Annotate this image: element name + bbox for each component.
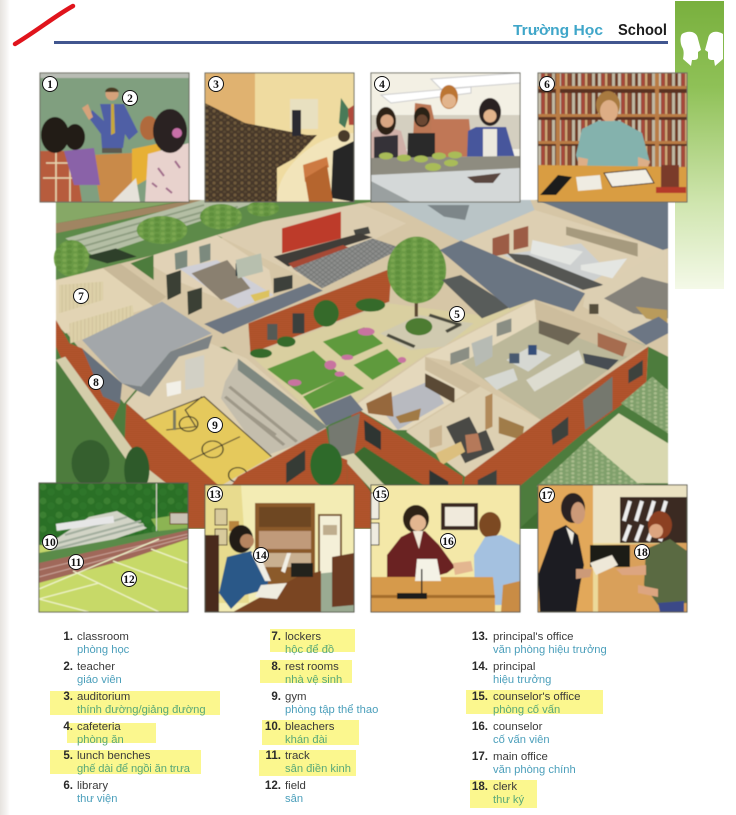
- item 16: 16.: [472, 720, 488, 733]
- flag: [339, 98, 350, 128]
- badge 11: 11: [71, 557, 82, 569]
- item 15: 15.: [472, 690, 488, 703]
- white margin below plan: [186, 529, 540, 619]
- item 18: clerk: [493, 781, 517, 793]
- connecting roof: [314, 395, 363, 426]
- item 2: teacher: [77, 661, 115, 673]
- bleachers stands: [221, 360, 326, 457]
- item 4: cafeteria: [77, 721, 121, 733]
- item 12: [265, 779, 306, 805]
- panel: athletics field: [39, 483, 188, 612]
- badge 14: [254, 548, 268, 562]
- badge 12: 12: [123, 574, 135, 586]
- benches area: [442, 275, 511, 318]
- item 6: thư viện: [77, 793, 117, 805]
- library corner: [583, 250, 668, 345]
- item 8: nhà vệ sinh: [285, 674, 342, 686]
- item 16: counselor: [493, 721, 543, 733]
- auditorium seats: [293, 238, 402, 288]
- badge 7: [74, 288, 88, 304]
- item 14: [472, 660, 551, 686]
- badge 13: [208, 486, 222, 502]
- item 3: thính đường/giảng đường: [77, 704, 206, 716]
- badge 14: 14: [255, 550, 267, 562]
- item 1: classroom: [77, 631, 129, 643]
- item 9: gym: [285, 691, 307, 703]
- item 11: 11.: [266, 749, 281, 762]
- item 10: bleachers: [285, 721, 335, 733]
- brick wall auditorium: [248, 268, 391, 353]
- sports field behind school: [54, 200, 377, 280]
- item 9: 9.: [271, 690, 281, 703]
- panel: cafeteria: [371, 73, 520, 202]
- icon: two talking faces: [680, 32, 723, 66]
- badge 13: 13: [209, 489, 221, 501]
- item 3: [63, 690, 206, 716]
- item 11: [266, 749, 351, 775]
- badge 3: [208, 76, 224, 92]
- students: [40, 109, 189, 202]
- badge 4: [374, 76, 390, 92]
- item 15: counselor's office: [493, 691, 580, 703]
- item 16: [472, 720, 550, 746]
- vocabulary column 3: [472, 630, 607, 806]
- front brick wall right: [461, 347, 648, 528]
- item 10: khán đài: [285, 734, 327, 746]
- bushes along wall: [250, 298, 385, 358]
- gym brick walls: [124, 403, 227, 528]
- item 18: 18.: [472, 780, 488, 793]
- hand-drawn red stroke: [15, 6, 73, 44]
- item 1: 1.: [63, 630, 73, 643]
- yellow highlighter marks: [50, 629, 603, 808]
- auditorium and classroom block: [154, 203, 406, 315]
- customers: [371, 85, 515, 173]
- grass verge: [39, 528, 188, 565]
- item 12: field: [285, 780, 306, 792]
- track: [39, 530, 188, 583]
- badge 10: 10: [44, 537, 56, 549]
- long roof: [440, 241, 585, 312]
- item 10: 10.: [265, 720, 281, 733]
- panel: classroom: [40, 73, 189, 202]
- reading student: [576, 91, 650, 173]
- item 17: văn phòng chính: [493, 764, 576, 776]
- badge 1: 1: [47, 79, 53, 91]
- item 15: phòng cố vấn: [493, 704, 560, 716]
- badge 1: [42, 76, 58, 92]
- badge 10: [42, 534, 58, 550]
- badge 17: 17: [541, 490, 553, 502]
- desk: [233, 571, 321, 612]
- item 4: 4.: [63, 720, 73, 733]
- briefcase: [590, 545, 630, 567]
- basketball court: [144, 397, 271, 500]
- header rule: [54, 41, 668, 44]
- badge 17: [540, 488, 554, 502]
- badge 6: [540, 76, 554, 92]
- desk: [92, 153, 132, 202]
- salads: [379, 152, 462, 171]
- desk: [371, 577, 495, 612]
- badge 11: [68, 554, 84, 570]
- courtyard: [250, 298, 532, 427]
- stage: [277, 133, 354, 202]
- principal: [205, 525, 271, 612]
- courtyard tree: [387, 237, 446, 317]
- item 6: [63, 779, 117, 805]
- roof band: [204, 283, 323, 334]
- badge 6: 6: [544, 79, 550, 91]
- panel: auditorium: [205, 73, 354, 202]
- item 11: sân điền kinh: [285, 763, 351, 775]
- figure: [292, 110, 301, 136]
- item 2: [63, 660, 122, 686]
- badge 2: [122, 90, 138, 106]
- item 4: phòng ăn: [77, 734, 124, 746]
- badge 5: 5: [454, 309, 460, 321]
- item 8: [271, 660, 342, 686]
- red stage curtain: [282, 212, 341, 253]
- item 14: 14.: [472, 660, 488, 673]
- title: Vietnamese: Trường Học: [513, 22, 603, 39]
- badge 8: [88, 374, 104, 390]
- desk: [538, 165, 687, 202]
- front offices: [354, 357, 541, 477]
- panel: counselor's office: [371, 485, 520, 612]
- speaker: [303, 130, 354, 202]
- item 7: hộc để đồ: [285, 644, 334, 656]
- item 18: [472, 780, 525, 806]
- panel: main office: [538, 485, 687, 612]
- panel: library: [538, 73, 687, 202]
- item 2: giáo viên: [77, 674, 122, 686]
- clerk woman: [616, 511, 687, 612]
- badge 3: 3: [213, 79, 219, 91]
- item 4: [63, 720, 124, 746]
- badge 15: 15: [375, 489, 387, 501]
- badge 9: [208, 418, 222, 432]
- side tab: green gradient with talking heads icon: [675, 1, 724, 289]
- item 14: hiệu trưởng: [493, 674, 551, 686]
- badge 16: [440, 534, 456, 548]
- item 5: lunch benches: [77, 750, 151, 762]
- item 9: [271, 690, 378, 716]
- rest rooms wing and left lawn: [56, 320, 166, 528]
- item 12: 12.: [265, 779, 281, 792]
- badge 4: 4: [379, 79, 385, 91]
- item 9: phòng tập thể thao: [285, 704, 378, 716]
- item 5: [63, 749, 191, 775]
- vocabulary column 2: [265, 630, 378, 805]
- badge 2: 2: [127, 93, 133, 105]
- item 13: 13.: [472, 630, 488, 643]
- item 14: principal: [493, 661, 535, 673]
- man in blue shirt: [474, 512, 520, 605]
- item 6: 6.: [63, 779, 73, 792]
- item 17: [472, 750, 576, 776]
- bleachers: [41, 523, 145, 555]
- item 6: library: [77, 780, 108, 792]
- item 8: rest rooms: [285, 661, 339, 673]
- item 7: [271, 630, 334, 656]
- item 2: 2.: [63, 660, 73, 673]
- number badges: [42, 76, 650, 586]
- item 3: 3.: [63, 690, 73, 703]
- item 3: auditorium: [77, 691, 130, 703]
- badge 12: [122, 572, 136, 586]
- vocabulary column 1: [63, 630, 206, 805]
- main office: [425, 300, 646, 420]
- upper cafeteria rooms: [381, 200, 668, 295]
- item 10: [265, 720, 335, 746]
- badge 8: 8: [93, 377, 99, 389]
- audience: [205, 103, 317, 202]
- gym roof: [70, 302, 213, 404]
- base floor of the school: [56, 200, 668, 477]
- badge 5: [450, 306, 464, 322]
- scoreboard: [170, 513, 188, 524]
- panel: principal's office: [205, 485, 354, 612]
- item 7: lockers: [285, 631, 321, 643]
- school cutaway plan: [54, 200, 668, 529]
- item 11: track: [285, 750, 310, 762]
- item 13: văn phòng hiệu trưởng: [493, 644, 607, 656]
- lockers wing: [56, 255, 166, 343]
- item 7: 7.: [271, 630, 281, 643]
- badge 9: 9: [212, 420, 218, 432]
- item 12: sân: [285, 793, 303, 805]
- badge 7: 7: [78, 291, 84, 303]
- badge 15: [374, 486, 388, 502]
- man with folder: [538, 493, 618, 612]
- item 1: [63, 630, 130, 656]
- item 8: 8.: [271, 660, 281, 673]
- teacher: [82, 88, 138, 148]
- item 18: thư ký: [493, 794, 525, 806]
- item 13: [472, 630, 607, 656]
- item 1: phòng học: [77, 644, 130, 656]
- item 15: [472, 690, 580, 716]
- right grounds: [341, 377, 668, 528]
- front brick wall centre: [347, 407, 469, 528]
- item 5: ghế dài để ngồi ăn trưa: [77, 763, 191, 775]
- badge 16: 16: [442, 536, 454, 548]
- counselor woman: [387, 505, 473, 577]
- badge 18: 18: [636, 547, 648, 559]
- title: English: School: [618, 22, 667, 39]
- field: [39, 539, 188, 612]
- item 17: main office: [493, 751, 548, 763]
- counter: [371, 156, 520, 202]
- item 13: principal's office: [493, 631, 573, 643]
- item 5: 5.: [63, 749, 73, 762]
- item 16: cố vấn viên: [493, 734, 550, 746]
- gym block: [126, 343, 327, 500]
- badge 18: [634, 544, 650, 560]
- armchair: [332, 553, 354, 607]
- item 17: 17.: [472, 750, 488, 763]
